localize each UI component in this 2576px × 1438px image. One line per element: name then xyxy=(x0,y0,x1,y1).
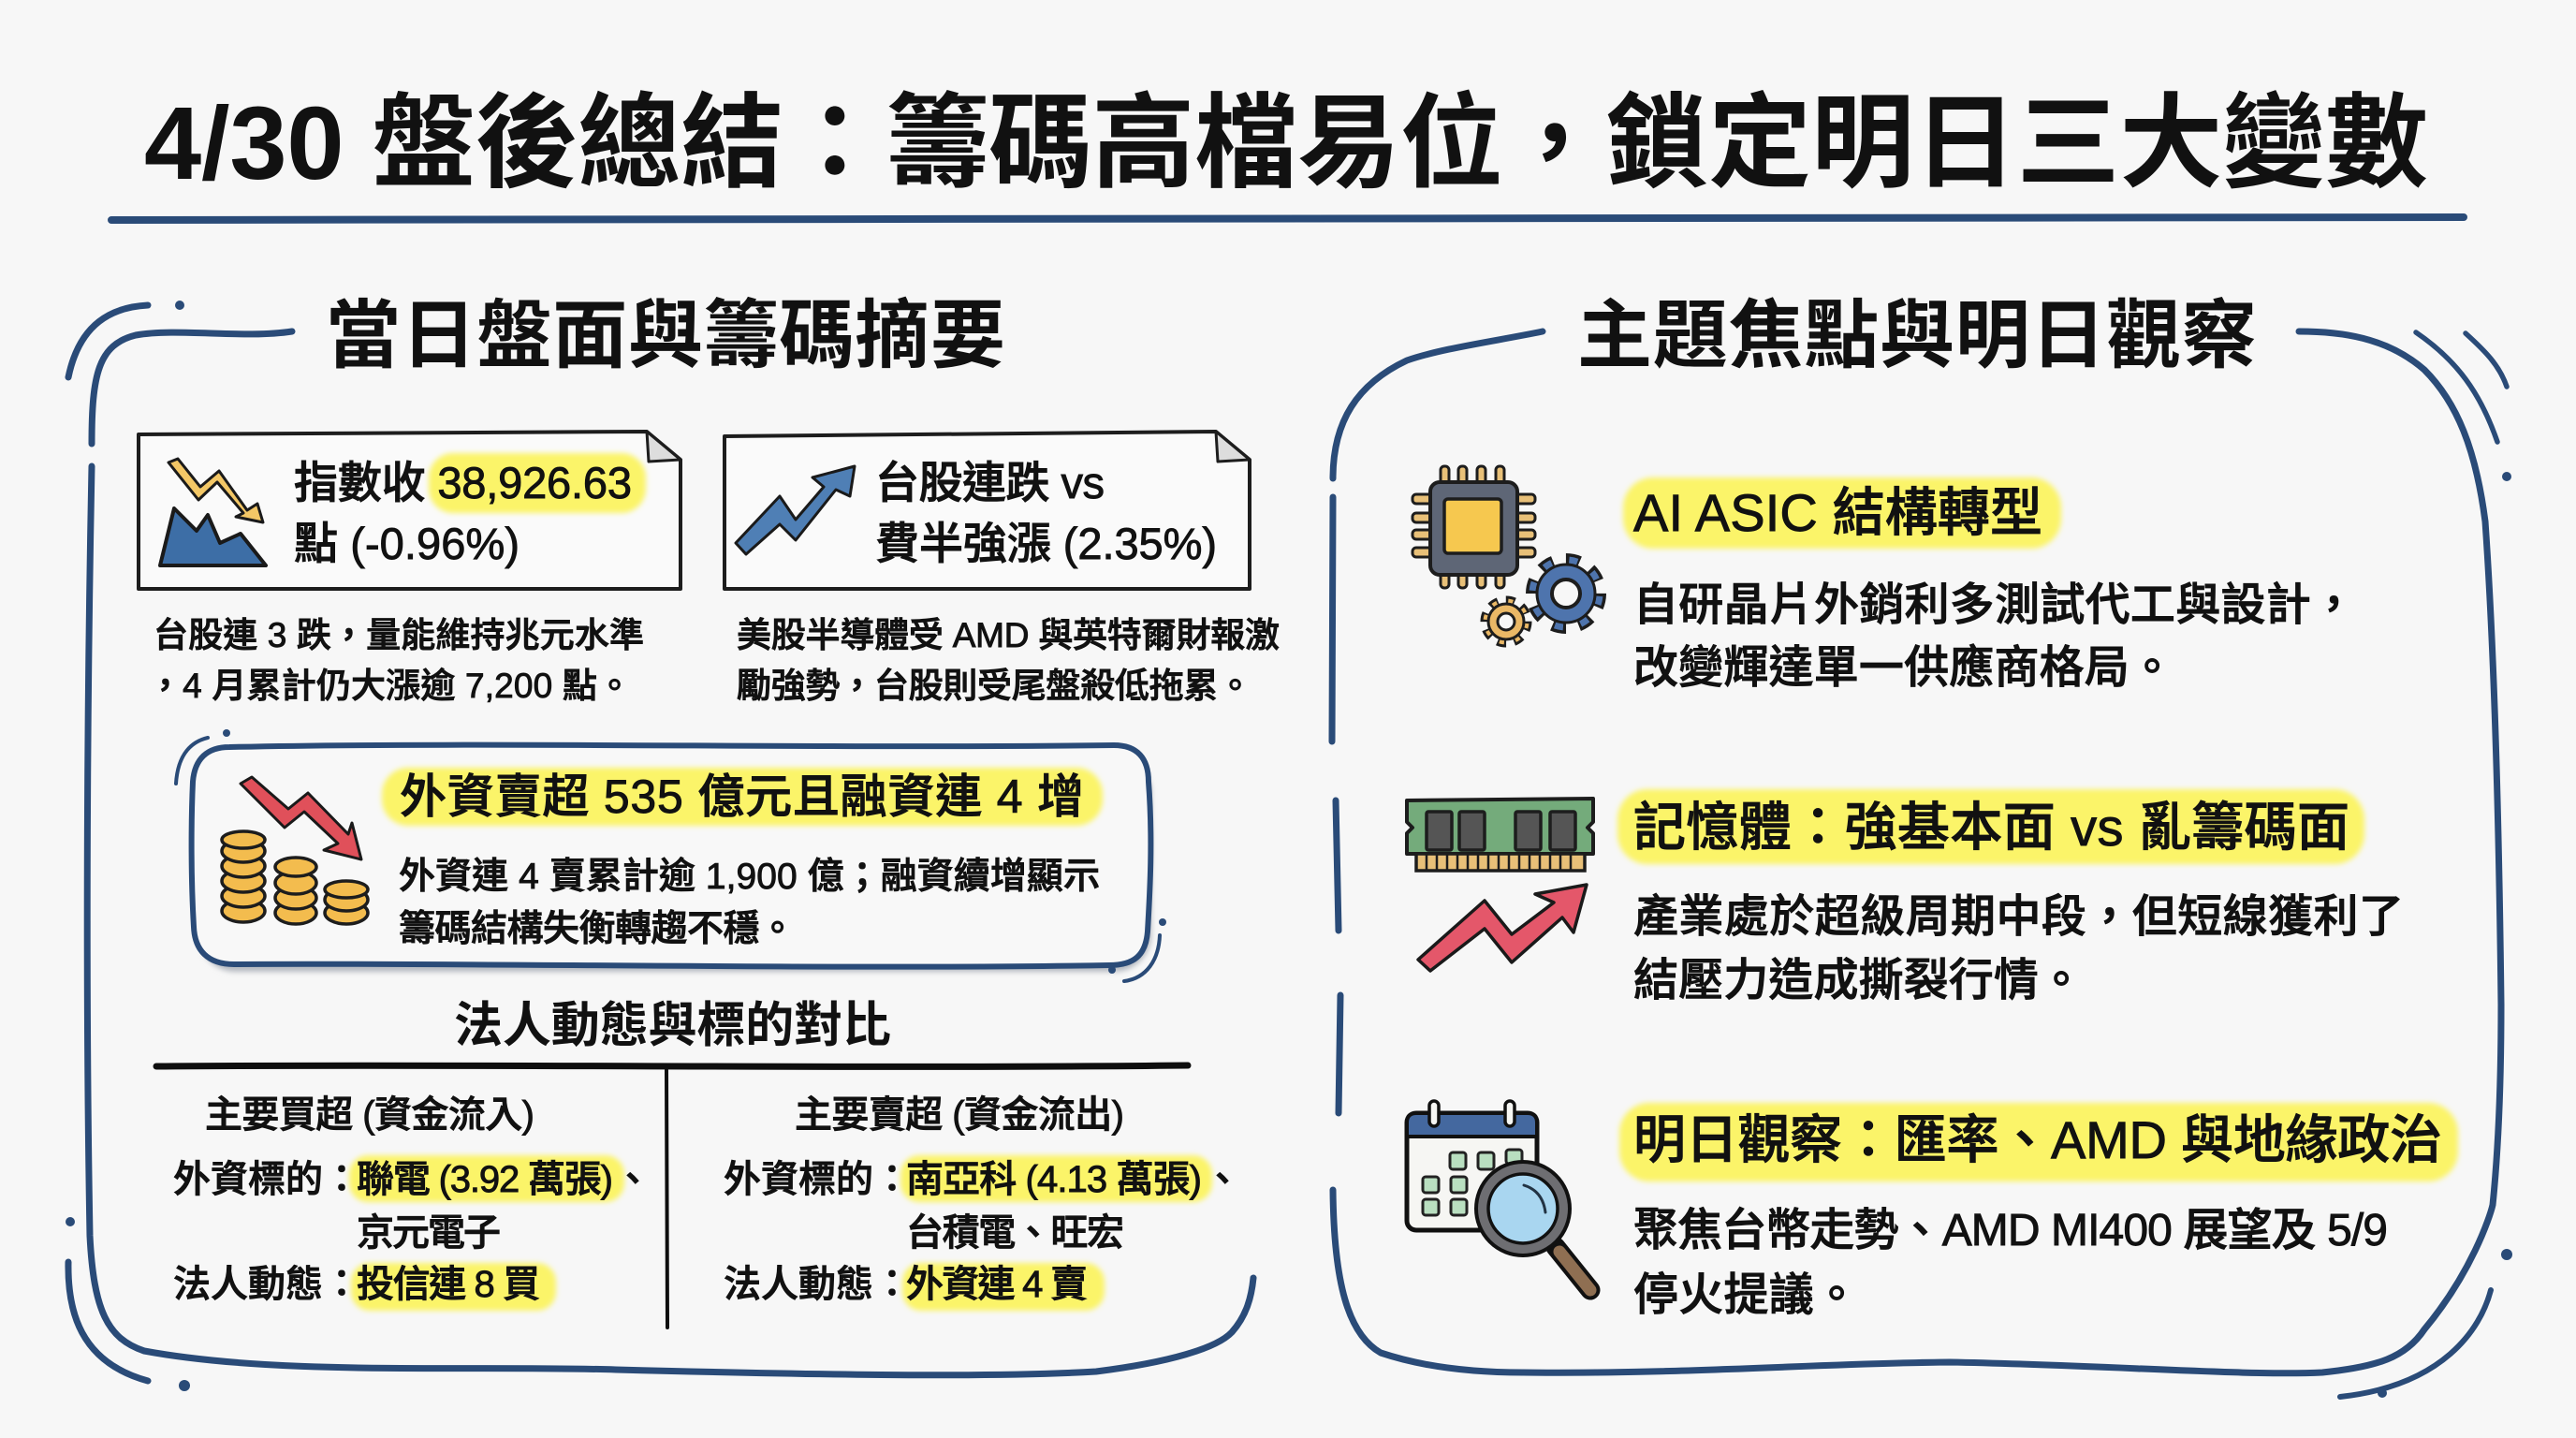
caption: US semiconductors xyxy=(737,616,1280,705)
panel frame: right xyxy=(1332,331,2512,1398)
card text line 1: 指數收 38,926.63 xyxy=(294,458,632,507)
card: TAIEX vs SOX xyxy=(724,432,1251,594)
institutional label: 法人動態： xyxy=(724,1264,911,1305)
icon: rising blue arrow xyxy=(736,466,855,554)
callout: foreign selling and margin xyxy=(176,729,1166,981)
icon: blue mountain chart xyxy=(160,508,266,565)
table heading: 法人動態與標的對比 xyxy=(454,999,891,1053)
table column divider xyxy=(666,1070,667,1328)
caption: US semiconductors: 美股半導體受 AMD 與英特爾財報激 xyxy=(737,616,1280,654)
highlight: Nanya xyxy=(900,1155,1212,1202)
card text line 2: 費半強漲 (2.35%) xyxy=(875,519,1217,568)
column: net buy xyxy=(173,1094,651,1311)
item body xyxy=(1633,1206,2388,1320)
item: memory xyxy=(1407,789,2404,1005)
item body xyxy=(1633,892,2404,1005)
item body: 聚焦台幣走勢、AMD MI400 展望及 5/9 xyxy=(1633,1206,2388,1255)
column heading: 主要買超 (資金流入) xyxy=(205,1094,534,1136)
caption: TAIEX: 台股連 3 跌，量能維持兆元水準 xyxy=(154,616,644,654)
column heading: 主要賣超 (資金流出) xyxy=(795,1094,1124,1136)
icon: chip with gears xyxy=(1412,466,1601,643)
highlight: callout heading xyxy=(382,768,1103,826)
item body: 改變輝達單一供應商格局。 xyxy=(1633,643,2174,693)
second target: 京元電子 xyxy=(357,1212,501,1254)
caption: TAIEX: ，4 月累計仍大漲逾 7,200 點。 xyxy=(148,667,632,705)
foreign target value: 聯電 (3.92 萬張) xyxy=(357,1159,613,1200)
callout body: 籌碼結構失衡轉趨不穩。 xyxy=(399,909,796,949)
item body: 結壓力造成撕裂行情。 xyxy=(1633,956,2084,1005)
foreign target value: 南亞科 (4.13 萬張) xyxy=(906,1159,1202,1200)
institutional label: 法人動態： xyxy=(173,1264,360,1305)
icon: red rising arrow xyxy=(1418,885,1587,971)
highlight: item heading xyxy=(1623,477,2061,549)
item body: 產業處於超級周期中段，但短線獲利了 xyxy=(1633,892,2404,942)
item: tomorrow's watch xyxy=(1407,1101,2458,1320)
item: AI ASIC xyxy=(1412,466,2356,693)
icon: red falling arrow xyxy=(241,777,361,859)
item heading: 明日觀察：匯率、AMD 與地緣政治 xyxy=(1633,1110,2442,1169)
caption: US semiconductors: 勵強勢，台股則受尾盤殺低拖累。 xyxy=(737,667,1252,705)
callout heading: 外資賣超 535 億元且融資連 4 增 xyxy=(400,770,1084,823)
card text line 1: 台股連跌 vs xyxy=(875,458,1105,507)
callout body xyxy=(399,857,1100,949)
item heading: 記憶體：強基本面 vs 亂籌碼面 xyxy=(1633,798,2349,857)
highlight: UMC xyxy=(349,1155,624,1202)
icon: coin stacks xyxy=(222,831,368,924)
comma: 、 xyxy=(1204,1159,1241,1200)
highlight: item heading xyxy=(1617,789,2364,864)
foreign target label: 外資標的： xyxy=(724,1159,911,1200)
left panel heading: 當日盤面與籌碼摘要 xyxy=(326,294,1005,377)
callout body: 外資連 4 賣累計逾 1,900 億；融資續增顯示 xyxy=(399,857,1100,897)
item heading: AI ASIC 結構轉型 xyxy=(1633,483,2042,542)
item body xyxy=(1633,580,2356,693)
table: institutional flows comparison xyxy=(156,999,1241,1328)
icon: calendar with magnifier xyxy=(1407,1101,1590,1290)
comma: 、 xyxy=(614,1159,651,1200)
panel frame: left xyxy=(66,301,1253,1391)
card text line 2: 點 (-0.96%) xyxy=(294,519,520,568)
title underline xyxy=(111,217,2464,220)
item body: 停火提議。 xyxy=(1633,1270,1859,1320)
table rule xyxy=(156,1065,1188,1066)
second target: 台積電、旺宏 xyxy=(906,1212,1124,1254)
highlight: index value xyxy=(429,453,646,513)
institutional value: 外資連 4 賣 xyxy=(906,1264,1088,1305)
institutional value: 投信連 8 買 xyxy=(357,1264,540,1305)
icon: falling yellow arrow xyxy=(168,459,263,522)
highlight: item heading xyxy=(1619,1103,2458,1181)
icon: memory module xyxy=(1407,799,1593,871)
title: 4/30 盤後總結：籌碼高檔易位，鎖定明日三大變數 xyxy=(144,86,2428,201)
highlight: trust buying xyxy=(351,1263,556,1311)
item body: 自研晶片外銷利多測試代工與設計， xyxy=(1633,580,2356,630)
column: net sell xyxy=(724,1094,1241,1311)
panel: daily market and chips summary xyxy=(66,294,1280,1391)
foreign target label: 外資標的： xyxy=(173,1159,360,1200)
card: index close xyxy=(139,432,681,594)
right panel heading: 主題焦點與明日觀察 xyxy=(1577,294,2257,377)
highlight: foreign selling xyxy=(902,1263,1105,1311)
panel: themes and tomorrow's watch xyxy=(1332,294,2512,1398)
caption: TAIEX xyxy=(148,616,644,705)
